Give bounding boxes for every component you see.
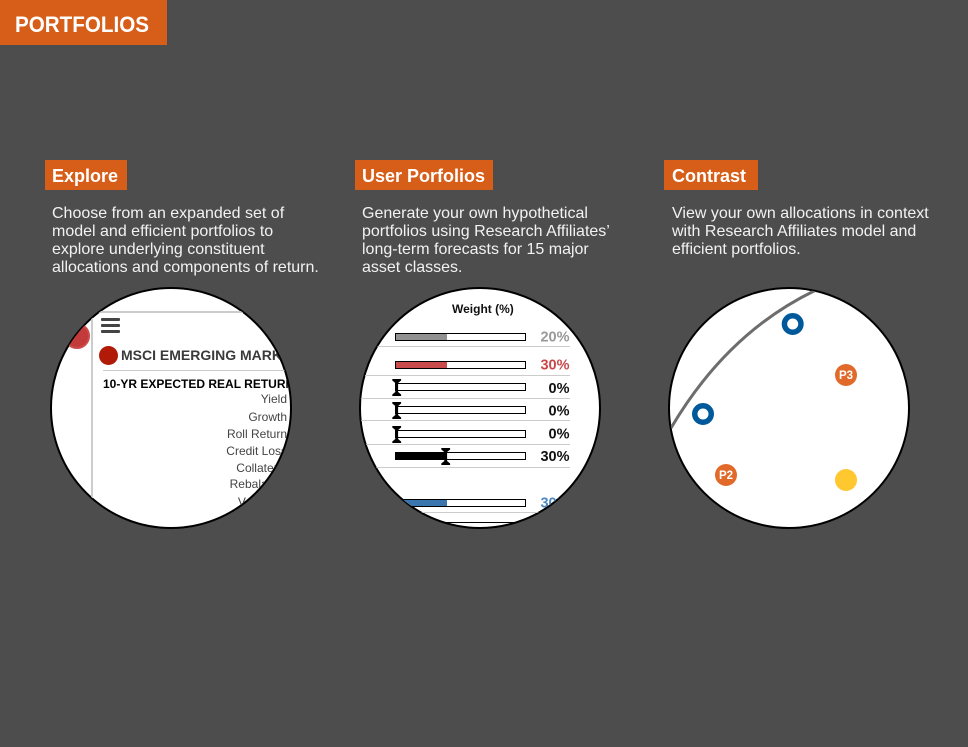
text block: explore description: allocations and components of return.: [52, 259, 319, 276]
title banner: [0, 0, 167, 45]
heading: explore: Explore: [52, 166, 118, 186]
slider row: 30% black: 30%: [540, 449, 570, 465]
text block: explore description: model and efficient portfolios to: [52, 223, 273, 240]
slider row: 0%: 0%: [549, 426, 570, 442]
heading: weight: Weight (%): [452, 302, 514, 316]
panel: user portfolios: [355, 160, 614, 528]
heading: contrast: Contrast: [672, 166, 746, 186]
marker: model portfolio: [695, 406, 711, 422]
text block: return components: Valuation: [238, 495, 287, 509]
slider row: 20% grey: [395, 332, 570, 342]
text block: return components: Rebalance: [230, 477, 287, 491]
title banner: PORTFOLIOS: [15, 12, 149, 37]
text block: user portfolios description: portfolios using Research Affiliates’: [362, 223, 609, 240]
slider row: 0%: 0%: [549, 381, 570, 397]
heading: index name: MSCI EMERGING MARKETS: [121, 347, 309, 363]
slider row: 30% black: [395, 448, 570, 465]
text block: return components: Growth: [248, 410, 287, 424]
text block: explore description: explore underlying constituent: [52, 241, 265, 258]
text block: user portfolios description: long-term forecasts for 15 major: [362, 241, 589, 258]
text block: contrast description: View your own allocations in context: [672, 205, 929, 222]
text block: explore description: Choose from an expanded set of: [52, 205, 285, 222]
text block: return components: Credit Loss: [226, 444, 287, 458]
marker: P2: [715, 464, 737, 486]
icon: red dot: [99, 346, 118, 365]
slider row: 0%: [392, 379, 570, 397]
marker: P3: P3: [839, 370, 853, 382]
heading: expected return: 10-YR EXPECTED REAL RETURN: [103, 377, 294, 391]
text block: user portfolios description: asset classes.: [362, 259, 462, 276]
text block: return components: Collateral: [236, 461, 287, 475]
slider row: 0%: [392, 402, 570, 420]
text block: return components: [226, 392, 287, 509]
slider row: 0%: 0%: [549, 404, 570, 420]
text block: return components: Roll Return: [227, 427, 287, 441]
heading: explore: [45, 160, 127, 190]
circle: efficient frontier chart: [669, 288, 909, 528]
heading: contrast: [664, 160, 758, 190]
slider row: 30% red: [395, 360, 570, 370]
panel: contrast: [664, 160, 933, 528]
slider row: 30% blue: [403, 498, 559, 508]
text block: user portfolios description: Generate your own hypothetical: [362, 205, 588, 222]
marker: model portfolio: [784, 316, 801, 332]
slider row: 30% blue: 30%: [540, 496, 570, 512]
text block: contrast description: with Research Affiliates model and: [671, 223, 916, 240]
slider row: 30% red: 30%: [540, 358, 570, 374]
slider row: 20% grey: 20%: [540, 330, 570, 346]
marker: yellow portfolio: [835, 469, 857, 491]
marker: P3: [835, 364, 857, 386]
icon: menu: [101, 318, 120, 333]
marker: P2: P2: [719, 470, 733, 482]
circle: portfolio detail view: [50, 287, 292, 529]
text block: return components: Yield: [261, 392, 287, 406]
text block: contrast description: efficient portfolios.: [672, 241, 801, 258]
heading: user portfolios: User Porfolios: [362, 166, 485, 186]
frontier curve: [671, 290, 815, 428]
icon: portfolio marker: [68, 326, 90, 349]
heading: user portfolios: [355, 160, 493, 190]
panel: explore: [45, 160, 319, 540]
circle: weight sliders: [355, 288, 600, 528]
slider row: 0%: [392, 426, 570, 443]
